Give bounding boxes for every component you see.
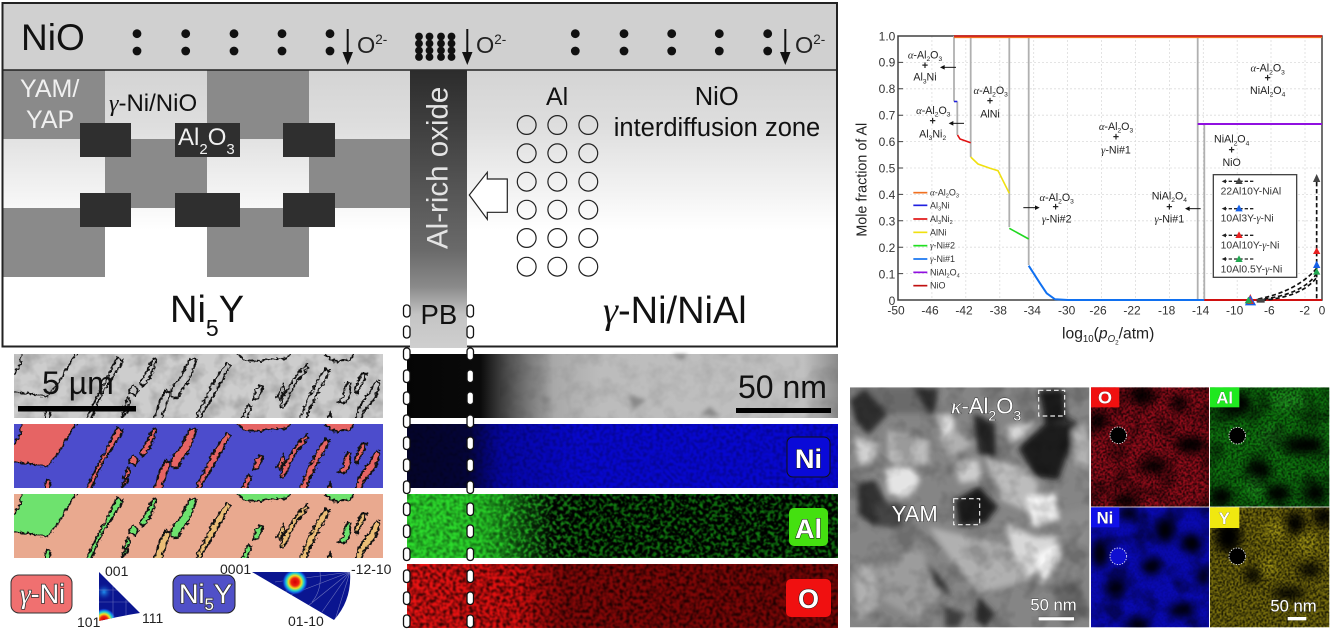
annotation: alpha-Al2O3 + gamma-Ni#2: α bbox=[1040, 193, 1046, 204]
legend: Ni5Y: Y bbox=[214, 579, 232, 609]
scale bar bbox=[1038, 617, 1074, 621]
tag: Ni: Ni bbox=[795, 444, 822, 474]
arrow bbox=[949, 121, 964, 126]
annotation: alpha-Al2O3 + Al3Ni2: 2 bbox=[935, 112, 939, 119]
arrow: oxygen flux 1 bbox=[342, 29, 353, 65]
EBSD band contrast map bbox=[14, 354, 383, 418]
chart legend: Ni bbox=[941, 200, 950, 210]
EDS map: O bbox=[1090, 385, 1209, 507]
y tick labels: 0.8 bbox=[879, 82, 896, 96]
x axis title: 10 bbox=[1083, 334, 1094, 345]
chart legend: 3 bbox=[938, 220, 941, 226]
chart legend: NiO bbox=[930, 281, 945, 291]
chart legend: 2 bbox=[946, 273, 950, 279]
chart legend: Ni bbox=[941, 214, 950, 224]
annotation: NiAl2O4 + NiO: NiO bbox=[1222, 157, 1241, 169]
annotation: alpha-Al2O3 + Al3Ni: 3 bbox=[923, 78, 927, 85]
chart legend box: 10Al3Y-γ-Ni bbox=[1221, 214, 1274, 225]
annotation: alpha-Al2O3 + AlNi: 2 bbox=[992, 92, 996, 99]
annotation: alpha-Al2O3 + gamma-Ni#2: O bbox=[1062, 192, 1070, 204]
oxidation path dashed curves bbox=[1257, 180, 1317, 301]
EDS map: Ni bbox=[1091, 507, 1210, 632]
label: gamma-Ni/NiAl: γ-Ni/NiAl bbox=[603, 290, 747, 332]
label: PB: PB bbox=[420, 299, 457, 330]
annotation: alpha-Al2O3 + gamma-Ni#1: -Al bbox=[1104, 121, 1117, 133]
pole figure: Ni5Y: 01-10 bbox=[288, 613, 324, 629]
tag: O bbox=[786, 579, 831, 617]
x tick labels: -6 bbox=[1264, 303, 1275, 317]
chart legend: γ-Ni#2 bbox=[930, 241, 955, 251]
label: Al2O3: 3 bbox=[226, 141, 235, 158]
annotation: alpha-Al2O3 + NiAl2O4: 4 bbox=[1282, 92, 1286, 99]
label: Al2O3: O bbox=[208, 124, 226, 151]
x tick labels: -2 bbox=[1299, 303, 1310, 317]
chart legend: Al bbox=[930, 200, 938, 210]
x axis title: ( bbox=[1094, 325, 1100, 342]
label: kappa-Al2O3: 3 bbox=[1013, 408, 1021, 424]
tag: O: O bbox=[798, 584, 819, 614]
panel: oxidation schematic bbox=[2, 3, 837, 348]
Al2O3 dark blocks bbox=[80, 123, 335, 227]
heading: NiO: NiO bbox=[21, 17, 85, 58]
tag: O: O bbox=[1098, 388, 1112, 408]
annotation: alpha-Al2O3 + gamma-Ni#1: 2 bbox=[1117, 128, 1121, 135]
annotation: alpha-Al2O3 + AlNi: α bbox=[974, 86, 980, 97]
y tick labels: 0.7 bbox=[879, 109, 896, 123]
EBSD phase map bbox=[14, 424, 383, 488]
annotation: alpha-Al2O3 + gamma-Ni#1: + bbox=[1113, 132, 1119, 144]
label: NiO interdiffusion zone: NiO bbox=[695, 83, 739, 111]
tag: Ni bbox=[787, 437, 830, 477]
tag: Y: Y bbox=[1219, 509, 1230, 528]
arrow bbox=[1185, 206, 1201, 211]
x tick labels: -10 bbox=[1226, 303, 1244, 317]
ring: Y map bbox=[1229, 548, 1246, 565]
annotation: alpha-Al2O3 + Al3Ni2: 2 bbox=[942, 135, 946, 142]
y tick labels: 1.0 bbox=[879, 29, 896, 43]
chart axes bbox=[898, 36, 1322, 300]
label: NiO interdiffusion zone: interdiffusion zone bbox=[614, 114, 820, 142]
y tick labels bbox=[879, 29, 896, 308]
annotation: alpha-Al2O3 + gamma-Ni#2: γ bbox=[1042, 214, 1047, 225]
EDS map: O bbox=[407, 564, 838, 628]
annotation: NiAl2O4 + gamma-Ni#1: 4 bbox=[1183, 197, 1187, 204]
chart legend: 3 bbox=[938, 206, 941, 212]
left chart annotations and labels bbox=[855, 29, 1076, 317]
ring: Ni map bbox=[1110, 548, 1127, 565]
annotation: alpha-Al2O3 + NiAl2O4: -Al bbox=[1256, 63, 1269, 75]
legend: Ni5Y bbox=[173, 575, 235, 614]
label: gamma-Ni/NiO: γ-Ni/NiO bbox=[109, 90, 197, 117]
chart legend box: 22Al10Y-NiAl bbox=[1221, 186, 1281, 197]
label: kappa-Al2O3: κ-Al bbox=[951, 393, 988, 418]
chart legend box: 10Al10Y-γ-Ni bbox=[1221, 241, 1279, 252]
annotation: alpha-Al2O3 + Al3Ni2: Ni bbox=[932, 128, 942, 140]
annotation: alpha-Al2O3 + Al3Ni: 3 bbox=[938, 56, 942, 63]
chart legend: AlNi bbox=[930, 227, 946, 237]
phase boundary lines bbox=[954, 36, 1204, 300]
y axis ticks bbox=[898, 62, 903, 274]
chart legend: 2 bbox=[946, 193, 949, 199]
annotation: alpha-Al2O3 + NiAl2O4: NiAl bbox=[1250, 85, 1270, 97]
EDS map: Y bbox=[1210, 507, 1333, 627]
x tick labels bbox=[887, 303, 1076, 317]
pole figure: gamma-Ni: 111 bbox=[142, 610, 163, 626]
x axis title: O bbox=[1108, 334, 1116, 345]
legend: gamma-Ni bbox=[11, 575, 72, 613]
annotation: alpha-Al2O3 + gamma-Ni#2: 2 bbox=[1058, 199, 1062, 206]
label: kappa-Al2O3: O bbox=[996, 393, 1013, 418]
annotation: alpha-Al2O3 + gamma-Ni#1: γ bbox=[1101, 145, 1106, 156]
label: O2-: O bbox=[795, 32, 813, 58]
annotation: NiAl2O4 + NiO: NiAl bbox=[1214, 134, 1234, 146]
arrow bbox=[1023, 205, 1040, 210]
annotation: alpha-Al2O3 + NiAl2O4: 3 bbox=[1281, 69, 1285, 76]
chart legend: O bbox=[949, 187, 956, 197]
annotation: alpha-Al2O3 + Al3Ni: O bbox=[930, 49, 938, 61]
scale label: 50 nm: 50 nm bbox=[1030, 596, 1077, 615]
EBSD orientation map bbox=[14, 494, 383, 558]
x tick labels: -38 bbox=[990, 303, 1007, 317]
y tick labels: 0.2 bbox=[879, 241, 896, 255]
annotation: alpha-Al2O3 + gamma-Ni#2: 3 bbox=[1070, 199, 1074, 206]
legend: Ni5Y: 5 bbox=[204, 595, 214, 614]
arrow: oxygen flux 2 bbox=[462, 29, 472, 65]
annotation: alpha-Al2O3 + gamma-Ni#1: -Ni#1 bbox=[1105, 144, 1131, 156]
path end markers bbox=[1245, 174, 1320, 305]
chart legend: α-Al bbox=[930, 187, 946, 197]
label: kappa-Al2O3: 2 bbox=[988, 408, 996, 424]
chart legend box bbox=[1213, 175, 1297, 277]
label: O2-: O bbox=[357, 32, 375, 58]
annotation: alpha-Al2O3 + AlNi: 3 bbox=[1004, 92, 1008, 99]
chart legend: NiAl bbox=[930, 267, 946, 277]
tag: O bbox=[1091, 387, 1119, 408]
chart legend: 4 bbox=[957, 273, 960, 279]
ring: O map bbox=[1110, 427, 1127, 444]
label: Ni5Y: Y bbox=[219, 289, 244, 331]
y tick labels: 0.4 bbox=[879, 188, 896, 202]
annotation: alpha-Al2O3 + NiAl2O4: O bbox=[1273, 85, 1282, 97]
label: O2-: 2- bbox=[494, 32, 506, 47]
annotation: alpha-Al2O3 + Al3Ni2: 3 bbox=[929, 135, 933, 142]
y axis title: Mole fraction of Al bbox=[855, 123, 871, 237]
chart legend: Al bbox=[930, 214, 938, 224]
annotation: alpha-Al2O3 + Al3Ni2: Al bbox=[919, 128, 929, 140]
annotation: alpha-Al2O3 + Al3Ni2: 3 bbox=[947, 112, 951, 119]
EDS map: Ni bbox=[407, 424, 838, 488]
annotation: NiAl2O4 + NiO: + bbox=[1229, 144, 1235, 156]
x tick labels: -18 bbox=[1158, 303, 1176, 317]
legend: gamma-Ni: γ-Ni bbox=[20, 579, 65, 609]
annotation: alpha-Al2O3 + AlNi: O bbox=[996, 85, 1004, 97]
x tick labels bbox=[1089, 303, 1326, 317]
dashed box: YAM bbox=[954, 499, 980, 525]
background gradient of internal oxidation zone bbox=[3, 70, 837, 230]
tag: Ni bbox=[1091, 507, 1119, 528]
annotation: alpha-Al2O3 + gamma-Ni#1: α bbox=[1099, 122, 1105, 133]
label: Al2O3: 2 bbox=[199, 141, 208, 158]
annotation: alpha-Al2O3 + AlNi: AlNi bbox=[980, 108, 1000, 120]
label: Al-rich oxide: Al-rich oxide bbox=[422, 87, 454, 249]
chart legend: γ-Ni#1 bbox=[930, 254, 955, 264]
tag: Al bbox=[1210, 387, 1239, 408]
annotation: alpha-Al2O3 + NiAl2O4: O bbox=[1273, 63, 1281, 75]
annotation: alpha-Al2O3 + Al3Ni2: O bbox=[938, 105, 947, 117]
label: YAM: YAM bbox=[892, 501, 938, 526]
annotation: NiAl2O4 + NiO: 2 bbox=[1234, 140, 1238, 147]
pole figure: Ni5Y: 0001 bbox=[220, 561, 251, 577]
annotation: alpha-Al2O3 + NiAl2O4: α bbox=[1251, 64, 1257, 75]
annotation: NiAl2O4 + gamma-Ni#1: 2 bbox=[1171, 197, 1175, 204]
x tick labels: 0 bbox=[1319, 303, 1326, 317]
annotation: alpha-Al2O3 + gamma-Ni#2: -Ni#2 bbox=[1046, 213, 1072, 225]
scale bar bbox=[18, 406, 136, 412]
annotation: alpha-Al2O3 + gamma-Ni#2: -Al bbox=[1045, 192, 1058, 204]
NiO band border bbox=[3, 69, 837, 71]
annotation: alpha-Al2O3 + NiAl2O4: 2 bbox=[1269, 69, 1273, 76]
label: YAM/YAP: YAM/ bbox=[20, 75, 79, 103]
panel: HAADF and EDS maps bbox=[850, 385, 1333, 632]
x axis title: log bbox=[1062, 325, 1083, 342]
pole figure: gamma-Ni bbox=[78, 566, 163, 627]
tag: Al bbox=[789, 508, 828, 546]
y tick labels: 0.9 bbox=[879, 56, 896, 70]
annotation: alpha-Al2O3 + Al3Ni: -Al bbox=[913, 49, 926, 61]
pole figure: Ni5Y: -12-10 bbox=[351, 561, 392, 577]
x tick labels: -46 bbox=[921, 303, 939, 317]
label: Al: Al bbox=[546, 83, 568, 111]
vacancy dots left bbox=[133, 29, 334, 55]
label: O2-: 2- bbox=[375, 32, 387, 47]
x tick labels: -26 bbox=[1089, 303, 1107, 317]
EDS map: Al bbox=[1210, 387, 1329, 507]
annotation: NiAl2O4 + gamma-Ni#1: γ bbox=[1154, 215, 1159, 226]
x axis title: 2 bbox=[1115, 339, 1119, 346]
panel: stability diagram chart bbox=[855, 29, 1326, 346]
annotation: alpha-Al2O3 + Al3Ni2: α bbox=[916, 106, 922, 117]
NiO band bbox=[3, 4, 837, 70]
x tick labels: -50 bbox=[887, 303, 905, 317]
x tick labels: -22 bbox=[1123, 303, 1141, 317]
annotation: alpha-Al2O3 + Al3Ni: α bbox=[908, 50, 914, 61]
grid lines bbox=[898, 36, 1322, 300]
HAADF image bbox=[850, 387, 1089, 627]
x tick labels: -14 bbox=[1192, 303, 1210, 317]
annotation: alpha-Al2O3 + AlNi: + bbox=[987, 95, 993, 107]
vacancy dots dense bbox=[415, 33, 455, 61]
annotation: NiAl2O4 + NiO: O bbox=[1237, 134, 1246, 146]
scale label: 50 nm: 50 nm bbox=[738, 369, 827, 405]
EDS map: Al bbox=[407, 494, 838, 558]
arrow: oxygen flux 3 bbox=[780, 29, 790, 65]
y tick labels: 0.3 bbox=[879, 215, 896, 229]
pole figure: gamma-Ni: 101 bbox=[77, 614, 101, 630]
YAM/YAP grey blocks bbox=[3, 70, 410, 277]
annotation: alpha-Al2O3 + NiAl2O4: + bbox=[1265, 73, 1271, 85]
x tick labels: -30 bbox=[1058, 303, 1076, 317]
annotation: NiAl2O4 + gamma-Ni#1: O bbox=[1175, 190, 1183, 202]
x tick labels: -34 bbox=[1024, 303, 1041, 317]
scale bar bbox=[736, 408, 831, 413]
annotation: alpha-Al2O3 + gamma-Ni#1: O bbox=[1121, 121, 1129, 133]
arrow bbox=[940, 65, 956, 70]
phase boundary dashed markers bbox=[404, 305, 474, 628]
arrow: hollow Al flux bbox=[469, 172, 507, 219]
y tick labels: 0.6 bbox=[879, 135, 896, 149]
label: Ni5Y: Ni bbox=[170, 289, 206, 331]
annotation: alpha-Al2O3 + Al3Ni: Al bbox=[913, 72, 923, 84]
chart legend: 3 bbox=[956, 193, 959, 199]
annotation: NiAl2O4 + gamma-Ni#1: + bbox=[1166, 202, 1172, 214]
pole figure: gamma-Ni: 001 bbox=[105, 563, 129, 579]
chart legend bbox=[913, 187, 960, 291]
legend: Ni5Y: Ni bbox=[179, 579, 204, 609]
x axis title: p bbox=[1098, 325, 1108, 342]
Al-rich oxide bar bbox=[410, 70, 467, 348]
tag: Ni: Ni bbox=[1097, 509, 1113, 528]
annotation: NiAl2O4 + gamma-Ni#1: NiAl bbox=[1152, 190, 1171, 202]
vacancy dots right bbox=[571, 29, 772, 55]
tag: Y bbox=[1210, 507, 1239, 528]
annotation: alpha-Al2O3 + gamma-Ni#1: 3 bbox=[1129, 128, 1133, 135]
annotation: alpha-Al2O3 + Al3Ni2: + bbox=[930, 115, 936, 127]
label: O2-: O bbox=[476, 32, 494, 58]
annotation: alpha-Al2O3 + AlNi: -Al bbox=[979, 85, 992, 97]
annotation: alpha-Al2O3 + Al3Ni: Ni bbox=[927, 72, 937, 84]
chart legend: O bbox=[950, 267, 957, 277]
phase curves bbox=[954, 36, 1322, 300]
tag: Al: Al bbox=[1216, 389, 1233, 408]
label: Al2O3: Al bbox=[178, 124, 199, 151]
label: O2-: 2- bbox=[813, 32, 825, 47]
chart legend box: 10Al0.5Y-γ-Ni bbox=[1221, 264, 1282, 275]
x axis title: /atm) bbox=[1119, 325, 1154, 342]
label: Ni5Y: 5 bbox=[206, 315, 219, 341]
dashed box: kappa-Al2O3 bbox=[1039, 390, 1065, 416]
scale bar bbox=[1288, 617, 1306, 620]
annotation: NiAl2O4 + gamma-Ni#1: -Ni#1 bbox=[1159, 214, 1184, 226]
label: YAM/YAP: YAP bbox=[26, 106, 74, 134]
annotation: alpha-Al2O3 + gamma-Ni#2: + bbox=[1053, 201, 1059, 213]
annotation: alpha-Al2O3 + Al3Ni: + bbox=[922, 60, 928, 72]
schematic frame bbox=[2, 3, 837, 346]
panel: EBSD maps bbox=[10, 350, 392, 632]
annotation: alpha-Al2O3 + NiAl2O4: 2 bbox=[1270, 92, 1274, 99]
pole figure: Ni5Y bbox=[220, 564, 391, 626]
y tick labels: 0.1 bbox=[879, 268, 896, 282]
y tick labels: 0 bbox=[889, 294, 896, 308]
annotation: alpha-Al2O3 + Al3Ni2: -Al bbox=[922, 105, 935, 117]
tag: Al: Al bbox=[795, 514, 822, 544]
panel: TEM and EDS maps bbox=[407, 354, 838, 628]
Al atom circles bbox=[517, 116, 598, 276]
y tick labels: 0.5 bbox=[879, 162, 896, 176]
TEM image bbox=[407, 354, 838, 418]
scale label: 5 µm: 5 µm bbox=[42, 365, 114, 401]
scale label: 50 nm: 50 nm bbox=[1270, 597, 1317, 616]
annotation: alpha-Al2O3 + Al3Ni: 2 bbox=[926, 56, 930, 63]
annotation: NiAl2O4 + NiO: 4 bbox=[1246, 140, 1250, 147]
chart legend: 2 bbox=[950, 220, 953, 226]
x tick labels: -42 bbox=[955, 303, 973, 317]
right chart annotations and labels bbox=[1062, 63, 1326, 346]
ring: Al map bbox=[1229, 427, 1246, 444]
